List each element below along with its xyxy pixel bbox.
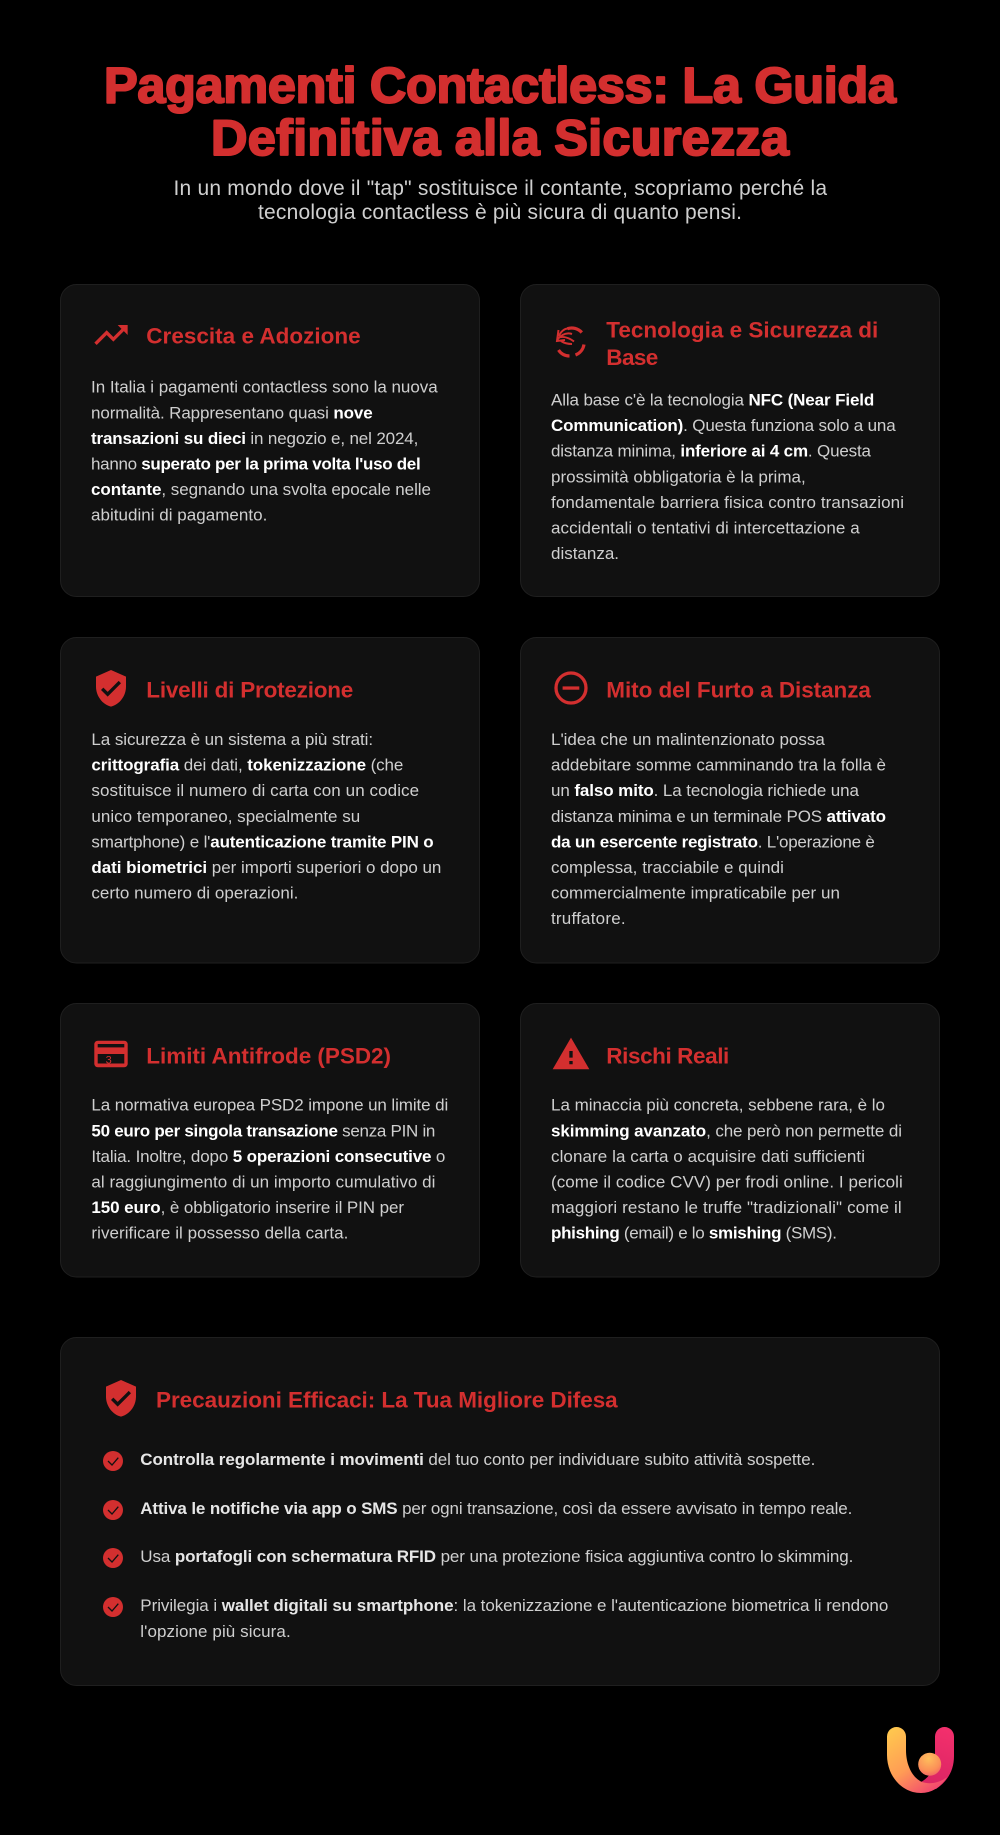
text block: limiti bbox=[91, 1096, 448, 1243]
text block: tecnologia: distanza. bbox=[551, 544, 619, 563]
text block: tecnologia: fondamentale barriera fisica contro transazioni bbox=[551, 493, 904, 512]
text block: mito: L'idea che un malintenzionato possa bbox=[551, 730, 825, 749]
text block: tecnologia: distanza minima, inferiore ai 4 cm. Questa bbox=[551, 442, 872, 461]
title bbox=[104, 57, 897, 166]
heading: tecnologia: Tecnologia e Sicurezza di bbox=[606, 317, 878, 342]
text block: limiti: riverificare il possesso della carta. bbox=[91, 1224, 348, 1243]
text block: crescita: contante, segnando una svolta epocale nelle bbox=[91, 480, 431, 499]
text block: mito: addebitare somme camminando tra la folla è bbox=[551, 756, 886, 775]
panel: crescita e adozione bbox=[60, 284, 480, 596]
subtitle bbox=[174, 177, 827, 224]
text block: livelli bbox=[91, 730, 441, 903]
icon: warning triangle bbox=[553, 1038, 589, 1069]
heading: livelli: Livelli di Protezione bbox=[146, 677, 353, 702]
icon: circle minus bbox=[556, 673, 586, 703]
text block: limiti: La normativa europea PSD2 impone un limite di bbox=[91, 1096, 448, 1115]
subtitle: In un mondo dove il "tap" sostituisce il contante, scopriamo perché la bbox=[174, 177, 827, 200]
panel: precauzioni efficaci bbox=[60, 1338, 940, 1686]
title: Pagamenti Contactless: La Guida bbox=[104, 57, 897, 114]
text block: rischi: phishing (email) e lo smishing (SMS). bbox=[551, 1224, 837, 1243]
heading: tecnologia: Base bbox=[606, 345, 658, 370]
text block: tecnologia bbox=[551, 390, 904, 563]
text block: crescita: transazioni su dieci in negozio e, nel 2024, bbox=[91, 429, 418, 448]
text block: livelli: sostituisce il numero di carta con un codice bbox=[91, 781, 419, 800]
text block: mito: da un esercente registrato. L'operazione è bbox=[551, 832, 875, 851]
text block: mito: complessa, tracciabile e quindi bbox=[551, 858, 784, 877]
text block: crescita: normalità. Rappresentano quasi nove bbox=[91, 403, 373, 422]
panel: limiti antifrode bbox=[60, 1004, 480, 1277]
heading: limiti: Limiti Antifrode (PSD2) bbox=[146, 1043, 391, 1068]
icon: payment card: 3 bbox=[106, 1054, 112, 1066]
text block: livelli: crittografia dei dati, tokenizzazione (che bbox=[91, 756, 403, 775]
heading: rischi: Rischi Reali bbox=[606, 1043, 729, 1068]
text block: rischi: (come il codice CVV) per frodi online. I pericoli bbox=[551, 1172, 903, 1192]
text block: livelli: La sicurezza è un sistema a più strati: bbox=[91, 730, 373, 749]
text block: mito: truffatore. bbox=[551, 909, 626, 928]
panel: mito del furto a distanza bbox=[520, 638, 940, 963]
text block: limiti: 50 euro per singola transazione senza PIN in bbox=[91, 1121, 435, 1140]
text block: livelli: dati biometrici per importi superiori o dopo un bbox=[91, 858, 441, 877]
title: Definitiva alla Sicurezza bbox=[211, 109, 790, 166]
subtitle: tecnologia contactless è più sicura di quanto pensi. bbox=[258, 201, 742, 224]
text block: mito: distanza minima e un terminale POS attivato bbox=[551, 807, 886, 826]
text block: rischi: skimming avanzato, che però non permette di bbox=[551, 1121, 902, 1140]
list item: wallet digitali: l'opzione più sicura. bbox=[140, 1622, 291, 1641]
text block: limiti: Italia. Inoltre, dopo 5 operazioni consecutive o bbox=[91, 1147, 445, 1166]
text block: limiti: al raggiungimento di un importo cumulativo di bbox=[91, 1172, 435, 1192]
text block: crescita: In Italia i pagamenti contactless sono la nuova bbox=[91, 378, 438, 397]
panel: livelli di protezione bbox=[60, 638, 480, 963]
text block: livelli: certo numero di operazioni. bbox=[91, 884, 298, 903]
text block: livelli: unico temporaneo, specialmente su bbox=[91, 807, 360, 826]
text block: crescita bbox=[91, 378, 438, 525]
heading: crescita e adozione: Crescita e Adozione bbox=[146, 323, 361, 348]
text block: rischi bbox=[551, 1096, 903, 1243]
list item: portafogli rfid: Usa portafogli con schermatura RFID per una protezione fisica aggiuntiva contro lo skimming. bbox=[140, 1547, 853, 1566]
text block: rischi: clonare la carta o acquisire dati sufficienti bbox=[551, 1147, 865, 1166]
icon: payment card bbox=[94, 1041, 128, 1067]
panel: tecnologia e sicurezza di base bbox=[520, 284, 940, 596]
text block: crescita: abitudini di pagamento. bbox=[91, 506, 267, 525]
icon: brand logo bbox=[887, 1727, 954, 1793]
text block: mito bbox=[551, 730, 886, 928]
text block: tecnologia: prossimità obbligatoria è la prima, bbox=[551, 467, 806, 486]
heading: tecnologia bbox=[606, 317, 878, 370]
panel: rischi reali bbox=[520, 1004, 940, 1277]
text block: tecnologia: accidentali o tentativi di intercettazione a bbox=[551, 518, 860, 538]
text block: mito: un falso mito. La tecnologia richiede una bbox=[551, 781, 860, 800]
text block: rischi: La minaccia più concreta, sebbene rara, è lo bbox=[551, 1096, 885, 1115]
list item: wallet digitali: Privilegia i wallet digitali su smartphone: la tokenizzazione e l'autenticazione biometrica li rendono bbox=[140, 1596, 888, 1615]
icon: trending up bbox=[94, 325, 128, 345]
heading: mito: Mito del Furto a Distanza bbox=[606, 677, 871, 702]
text block: tecnologia: Alla base c'è la tecnologia NFC (Near Field bbox=[551, 390, 874, 410]
text block: rischi: maggiori restano le truffe "tradizionali" come il bbox=[551, 1198, 902, 1217]
list item: wallet digitali bbox=[103, 1596, 888, 1641]
text block: crescita: hanno superato per la prima volta l'uso del bbox=[91, 454, 421, 474]
text block: mito: commercialmente impraticabile per un bbox=[551, 884, 840, 903]
icon: nfc ring with scribble bbox=[557, 328, 584, 356]
list item: controlla i movimenti: Controlla regolarmente i movimenti del tuo conto per individuare subito attività sospette. bbox=[140, 1450, 815, 1469]
text block: tecnologia: Communication). Questa funziona solo a una bbox=[551, 416, 896, 435]
icon: shield check large bbox=[106, 1380, 136, 1417]
icon: shield check bbox=[96, 670, 126, 707]
list item: attiva le notifiche: Attiva le notifiche via app o SMS per ogni transazione, così da essere avvisato in tempo reale. bbox=[140, 1499, 852, 1518]
text block: livelli: smartphone) e l'autenticazione tramite PIN o bbox=[91, 832, 434, 851]
heading: precauzioni: Precauzioni Efficaci: La Tua Migliore Difesa bbox=[156, 1388, 618, 1413]
text block: limiti: 150 euro, è obbligatorio inserire il PIN per bbox=[91, 1198, 404, 1217]
